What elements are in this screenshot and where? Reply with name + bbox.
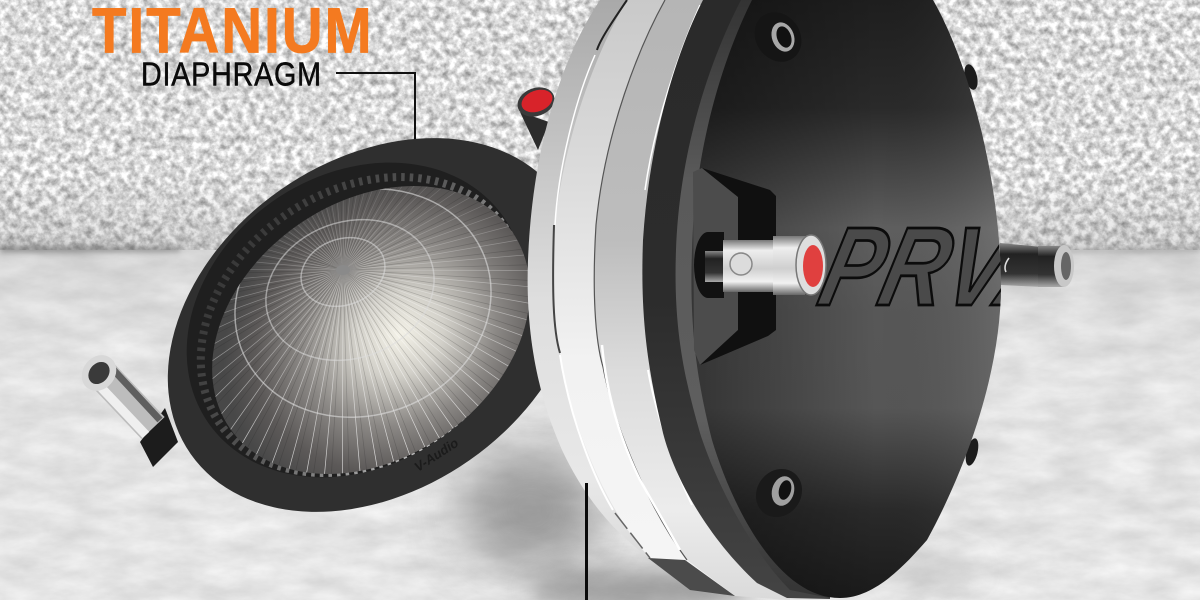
wall and floor seam: [0, 245, 1200, 254]
band highlights and grooves: [553, 0, 700, 560]
background: concrete floor: [0, 250, 1200, 600]
diaphragm assembly: [83, 138, 541, 512]
floor shadow under product: [460, 450, 980, 600]
dome side shading: [691, 0, 1001, 598]
diaphragm brand mark: V-Audio: [411, 435, 461, 475]
bottom bolt: [747, 460, 811, 526]
middle silver band: [553, 0, 790, 600]
inner silver band: [594, 0, 790, 600]
leader line to driver body: [585, 483, 588, 600]
floor upper shading: [0, 250, 1200, 600]
driver small bolts on edge: [962, 63, 981, 467]
embossed PRV logo: PRVA: [809, 205, 1082, 329]
driver serial label: [648, 558, 735, 596]
outer silver band: [528, 0, 790, 600]
main red terminal: [694, 232, 826, 298]
subtitle: DIAPHRAGM: DIAPHRAGM: [141, 56, 322, 93]
diaphragm terminal: [75, 348, 178, 467]
diaphragm outer ring: [96, 61, 654, 589]
terminal recess: [693, 168, 776, 365]
wall lower shading: [0, 0, 1200, 252]
leader line to diaphragm: [336, 73, 415, 141]
titanium dome: [157, 126, 585, 534]
diaphragm inner surround: [125, 98, 587, 542]
black rim: [642, 0, 830, 599]
main black dome: [691, 0, 1001, 598]
diaphragm bead ring: [143, 116, 581, 534]
rim highlight stripe: [676, 0, 830, 598]
compression driver: [528, 0, 1001, 600]
right terminal: [1000, 243, 1074, 287]
icon: red connector behind driver: [513, 82, 559, 150]
background: concrete wall: [0, 0, 1200, 252]
dome radial ribs and concentric rings: [212, 186, 528, 474]
top bolt: [745, 3, 811, 71]
